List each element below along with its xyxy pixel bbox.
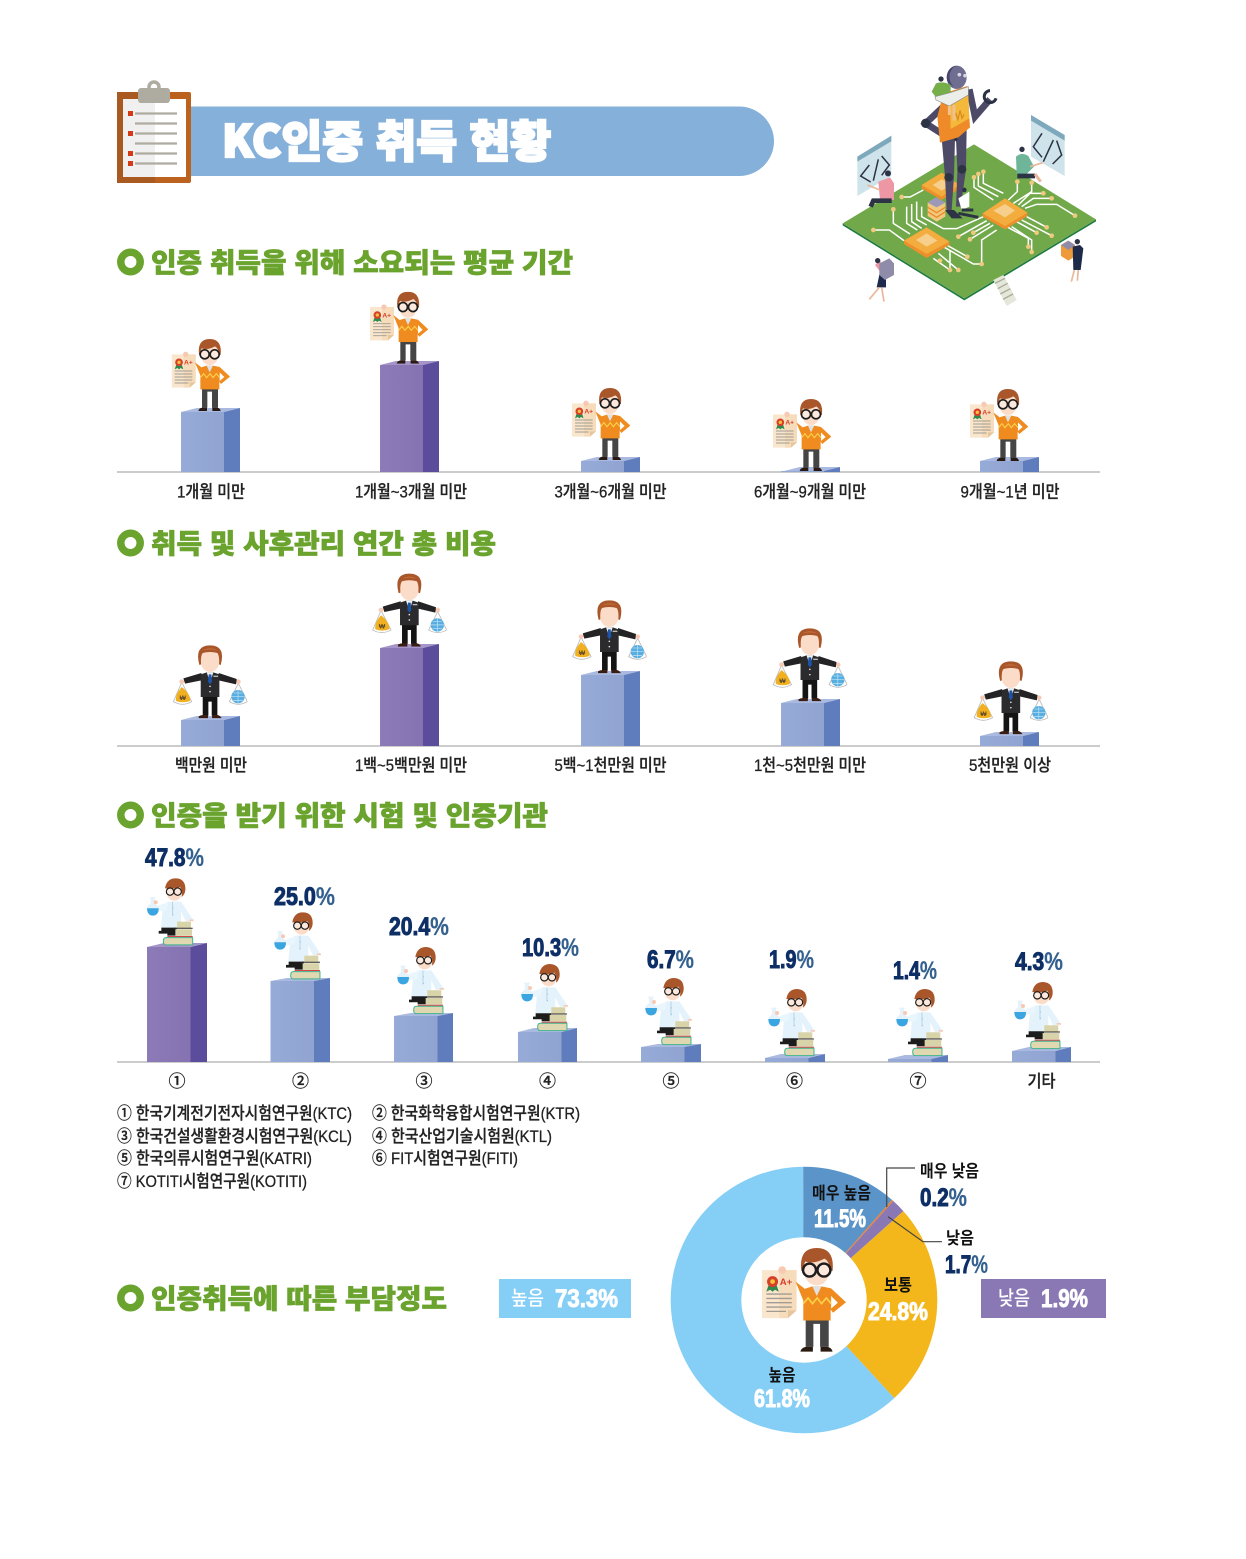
chart: 시험 및 인증기관: 6.7% bbox=[647, 946, 694, 974]
legend: 기관 목록: ⑥ FIT시험연구원(FITI) bbox=[372, 1149, 518, 1168]
chart: 시험 및 인증기관: 기타 bbox=[1028, 1072, 1056, 1091]
callout: 높음 73.3%: 높음 bbox=[511, 1282, 544, 1311]
donut chart: 부담정도: 11.5% bbox=[814, 1205, 866, 1233]
chart: 소요 기간: 1개월 미만 bbox=[177, 482, 245, 502]
donut chart: 부담정도: 1.7% bbox=[945, 1251, 988, 1279]
callout: 낮음 1.9%: 1.9% bbox=[1041, 1285, 1088, 1313]
chart: 시험 및 인증기관: 1.9% bbox=[769, 946, 814, 974]
donut chart: 부담정도: 매우 높음 bbox=[812, 1179, 871, 1204]
chart: 시험 및 인증기관: ② bbox=[292, 1072, 309, 1091]
heading: 부담정도: 인증취득에 따른 부담정도 bbox=[151, 1278, 447, 1316]
legend: 기관 목록: ⑤ 한국의류시험연구원(KATRI) bbox=[117, 1149, 312, 1168]
callout: 높음 73.3% bbox=[499, 1279, 631, 1318]
chart: 연간 비용: 백만원 미만 bbox=[175, 756, 247, 775]
legend: 기관 목록: ⑦ KOTITI시험연구원(KOTITI) bbox=[117, 1172, 307, 1191]
donut chart: 부담정도: 보통 bbox=[884, 1271, 912, 1296]
chart: 연간 비용: 5천만원 이상 bbox=[969, 756, 1051, 775]
callout: 낮음 1.9%: 낮음 bbox=[998, 1282, 1030, 1311]
heading: 평균 기간: 인증 취득을 위해 소요되는 평균 기간 bbox=[151, 242, 573, 280]
chart: 시험 및 인증기관: ⑥ bbox=[786, 1072, 803, 1091]
donut chart: 부담정도: 매우 낮음 bbox=[920, 1157, 979, 1182]
legend: 기관 목록: ② 한국화학융합시험연구원(KTR) bbox=[372, 1104, 580, 1123]
chart: 시험 및 인증기관: 20.4% bbox=[389, 913, 449, 941]
chart: 시험 및 인증기관: ④ bbox=[539, 1072, 556, 1091]
illustration: robot on circuit board bbox=[843, 66, 1096, 306]
donut chart: 부담정도: 높음 bbox=[768, 1361, 796, 1386]
chart: 시험 및 인증기관: ① bbox=[168, 1072, 186, 1091]
legend: 기관 목록: ③ 한국건설생활환경시험연구원(KCL) bbox=[117, 1127, 352, 1146]
chart: 시험 및 인증기관: 1.4% bbox=[893, 957, 937, 985]
heading: 시험 및 인증기관: 인증을 받기 위한 시험 및 인증기관 bbox=[151, 794, 548, 834]
legend: 기관 목록: ④ 한국산업기술시험원(KTL) bbox=[372, 1127, 552, 1146]
chart: 시험 및 인증기관: 4.3% bbox=[1015, 948, 1063, 976]
icon: clipboard bbox=[117, 82, 191, 183]
chart: 시험 및 인증기관: ③ bbox=[416, 1072, 432, 1091]
title: KC인증 취득 현황 bbox=[222, 106, 551, 170]
chart: 연간 비용 bbox=[117, 574, 1100, 775]
chart: 소요 기간: 1개월~3개월 미만 bbox=[355, 482, 467, 502]
chart: 연간 비용: 1백~5백만원 미만 bbox=[355, 756, 467, 775]
callout: 낮음 1.9% bbox=[981, 1279, 1106, 1318]
chart: 소요 기간: 9개월~1년 미만 bbox=[960, 482, 1060, 502]
chart: 소요 기간 bbox=[117, 292, 1100, 502]
donut chart: 부담정도: 61.8% bbox=[754, 1385, 810, 1413]
chart: 시험 및 인증기관: 10.3% bbox=[522, 934, 579, 962]
chart: 시험 및 인증기관: 47.8% bbox=[145, 844, 204, 872]
chart: 소요 기간: 3개월~6개월 미만 bbox=[554, 482, 667, 502]
heading: 연간 총 비용: 취득 및 사후관리 연간 총 비용 bbox=[151, 522, 496, 562]
robot legs bbox=[942, 128, 967, 210]
chart: 연간 비용: 1천~5천만원 미만 bbox=[754, 756, 866, 775]
chart: 시험 및 인증기관 bbox=[117, 844, 1100, 1091]
chart: 시험 및 인증기관: ⑦ bbox=[910, 1072, 926, 1091]
donut chart: 부담정도: 0.2% bbox=[920, 1184, 967, 1212]
donut chart: 부담정도: 낮음 bbox=[946, 1224, 974, 1249]
donut chart: 부담정도: 24.8% bbox=[868, 1298, 928, 1326]
chart: 시험 및 인증기관: ⑤ bbox=[662, 1072, 680, 1091]
legend: 기관 목록 bbox=[117, 1104, 580, 1191]
donut chart: 부담정도 bbox=[706, 1157, 988, 1413]
legend: 기관 목록: ① 한국기계전기전자시험연구원(KTC) bbox=[117, 1104, 352, 1123]
chart: 시험 및 인증기관: 25.0% bbox=[274, 883, 335, 911]
chart: 소요 기간: 6개월~9개월 미만 bbox=[754, 482, 866, 502]
callout: 높음 73.3%: 73.3% bbox=[555, 1285, 618, 1313]
chart: 연간 비용: 5백~1천만원 미만 bbox=[554, 756, 667, 775]
title banner bbox=[191, 106, 774, 176]
